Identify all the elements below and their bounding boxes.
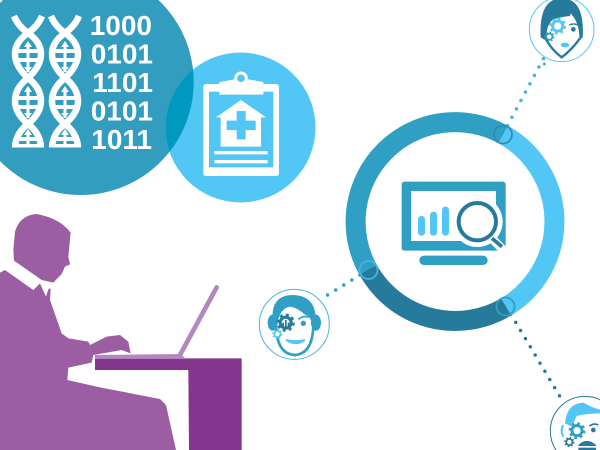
dotted connector: top face	[503, 50, 548, 134]
binary digits: 1011	[91, 124, 152, 155]
desk	[95, 358, 242, 450]
panel: clipboard circle	[166, 52, 316, 202]
figure: seated person at laptop	[0, 214, 242, 450]
laptop	[180, 287, 217, 355]
binary digits: 0101	[91, 96, 153, 126]
ring marker: left	[360, 261, 378, 279]
icon: left face	[259, 289, 329, 359]
ring marker: top	[494, 126, 512, 144]
person body	[0, 270, 176, 450]
dotted connector: left face	[326, 270, 368, 296]
dotted connector: bottom face	[506, 306, 562, 400]
icon: monitor with magnifier	[402, 182, 506, 265]
binary digits: 0101	[91, 38, 153, 70]
icon: DNA helix left	[12, 16, 44, 148]
icon: top face	[529, 0, 594, 65]
icon: medical clipboard	[203, 73, 279, 176]
binary digits: 1000	[90, 10, 152, 41]
panel: central ring	[356, 122, 554, 321]
binary digits: 1101	[92, 67, 153, 98]
binary digits	[90, 10, 153, 155]
panel: DNA data circle	[0, 0, 194, 195]
icon: bottom face	[550, 396, 600, 450]
icon: DNA helix right	[49, 16, 81, 148]
ring marker: bottom	[496, 298, 514, 316]
person head	[13, 214, 71, 283]
